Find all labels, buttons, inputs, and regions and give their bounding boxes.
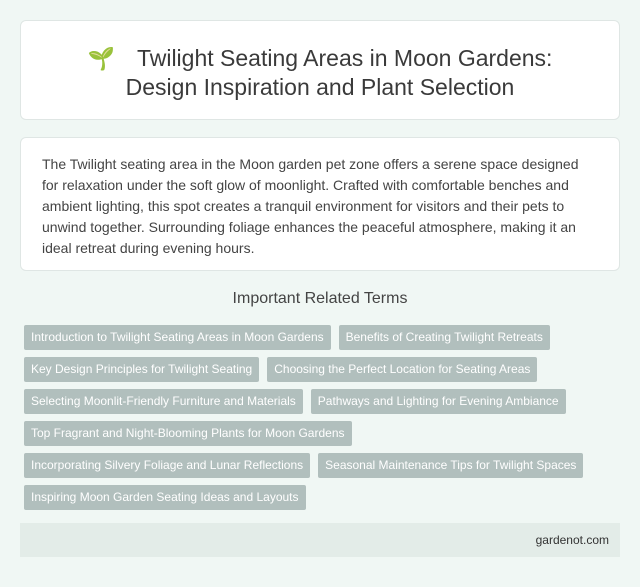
- related terms heading: Important Related Terms: [233, 290, 407, 307]
- tag list: Selecting Moonlit-Friendly Furniture and Materials: [31, 394, 296, 408]
- footer: gardenot.com: [536, 533, 609, 547]
- description card: The Twilight seating area in the Moon garden pet zone offers a serene space designed for relaxation under the soft glow of moonlight. Crafted with comfortable benches and ambient lighting, this spot creates a tranquil environment for visitors and their pets to unwind together. Surrounding foliage enhances the peaceful atmosphere, making it an ideal retreat during evening hours.: [42, 156, 579, 256]
- tag list: Key Design Principles for Twilight Seating: [31, 362, 252, 376]
- tag list: Introduction to Twilight Seating Areas in Moon Gardens: [31, 330, 324, 344]
- tag list: Top Fragrant and Night-Blooming Plants for Moon Gardens: [31, 426, 344, 440]
- title card: Design Inspiration and Plant Selection: [126, 74, 514, 100]
- tag list: Incorporating Silvery Foliage and Lunar Reflections: [31, 458, 303, 472]
- title card: 🌱 Twilight Seating Areas in Moon Gardens:: [88, 45, 552, 71]
- title card: [20, 20, 620, 120]
- tag list: Seasonal Maintenance Tips for Twilight Spaces: [325, 458, 576, 472]
- tag list: Benefits of Creating Twilight Retreats: [346, 330, 543, 344]
- tag list: Inspiring Moon Garden Seating Ideas and Layouts: [31, 490, 299, 504]
- tag list: [24, 325, 583, 510]
- tag list: Choosing the Perfect Location for Seating Areas: [274, 362, 530, 376]
- description card: [20, 137, 620, 271]
- footer: [20, 523, 620, 557]
- tag list: Pathways and Lighting for Evening Ambiance: [318, 394, 559, 408]
